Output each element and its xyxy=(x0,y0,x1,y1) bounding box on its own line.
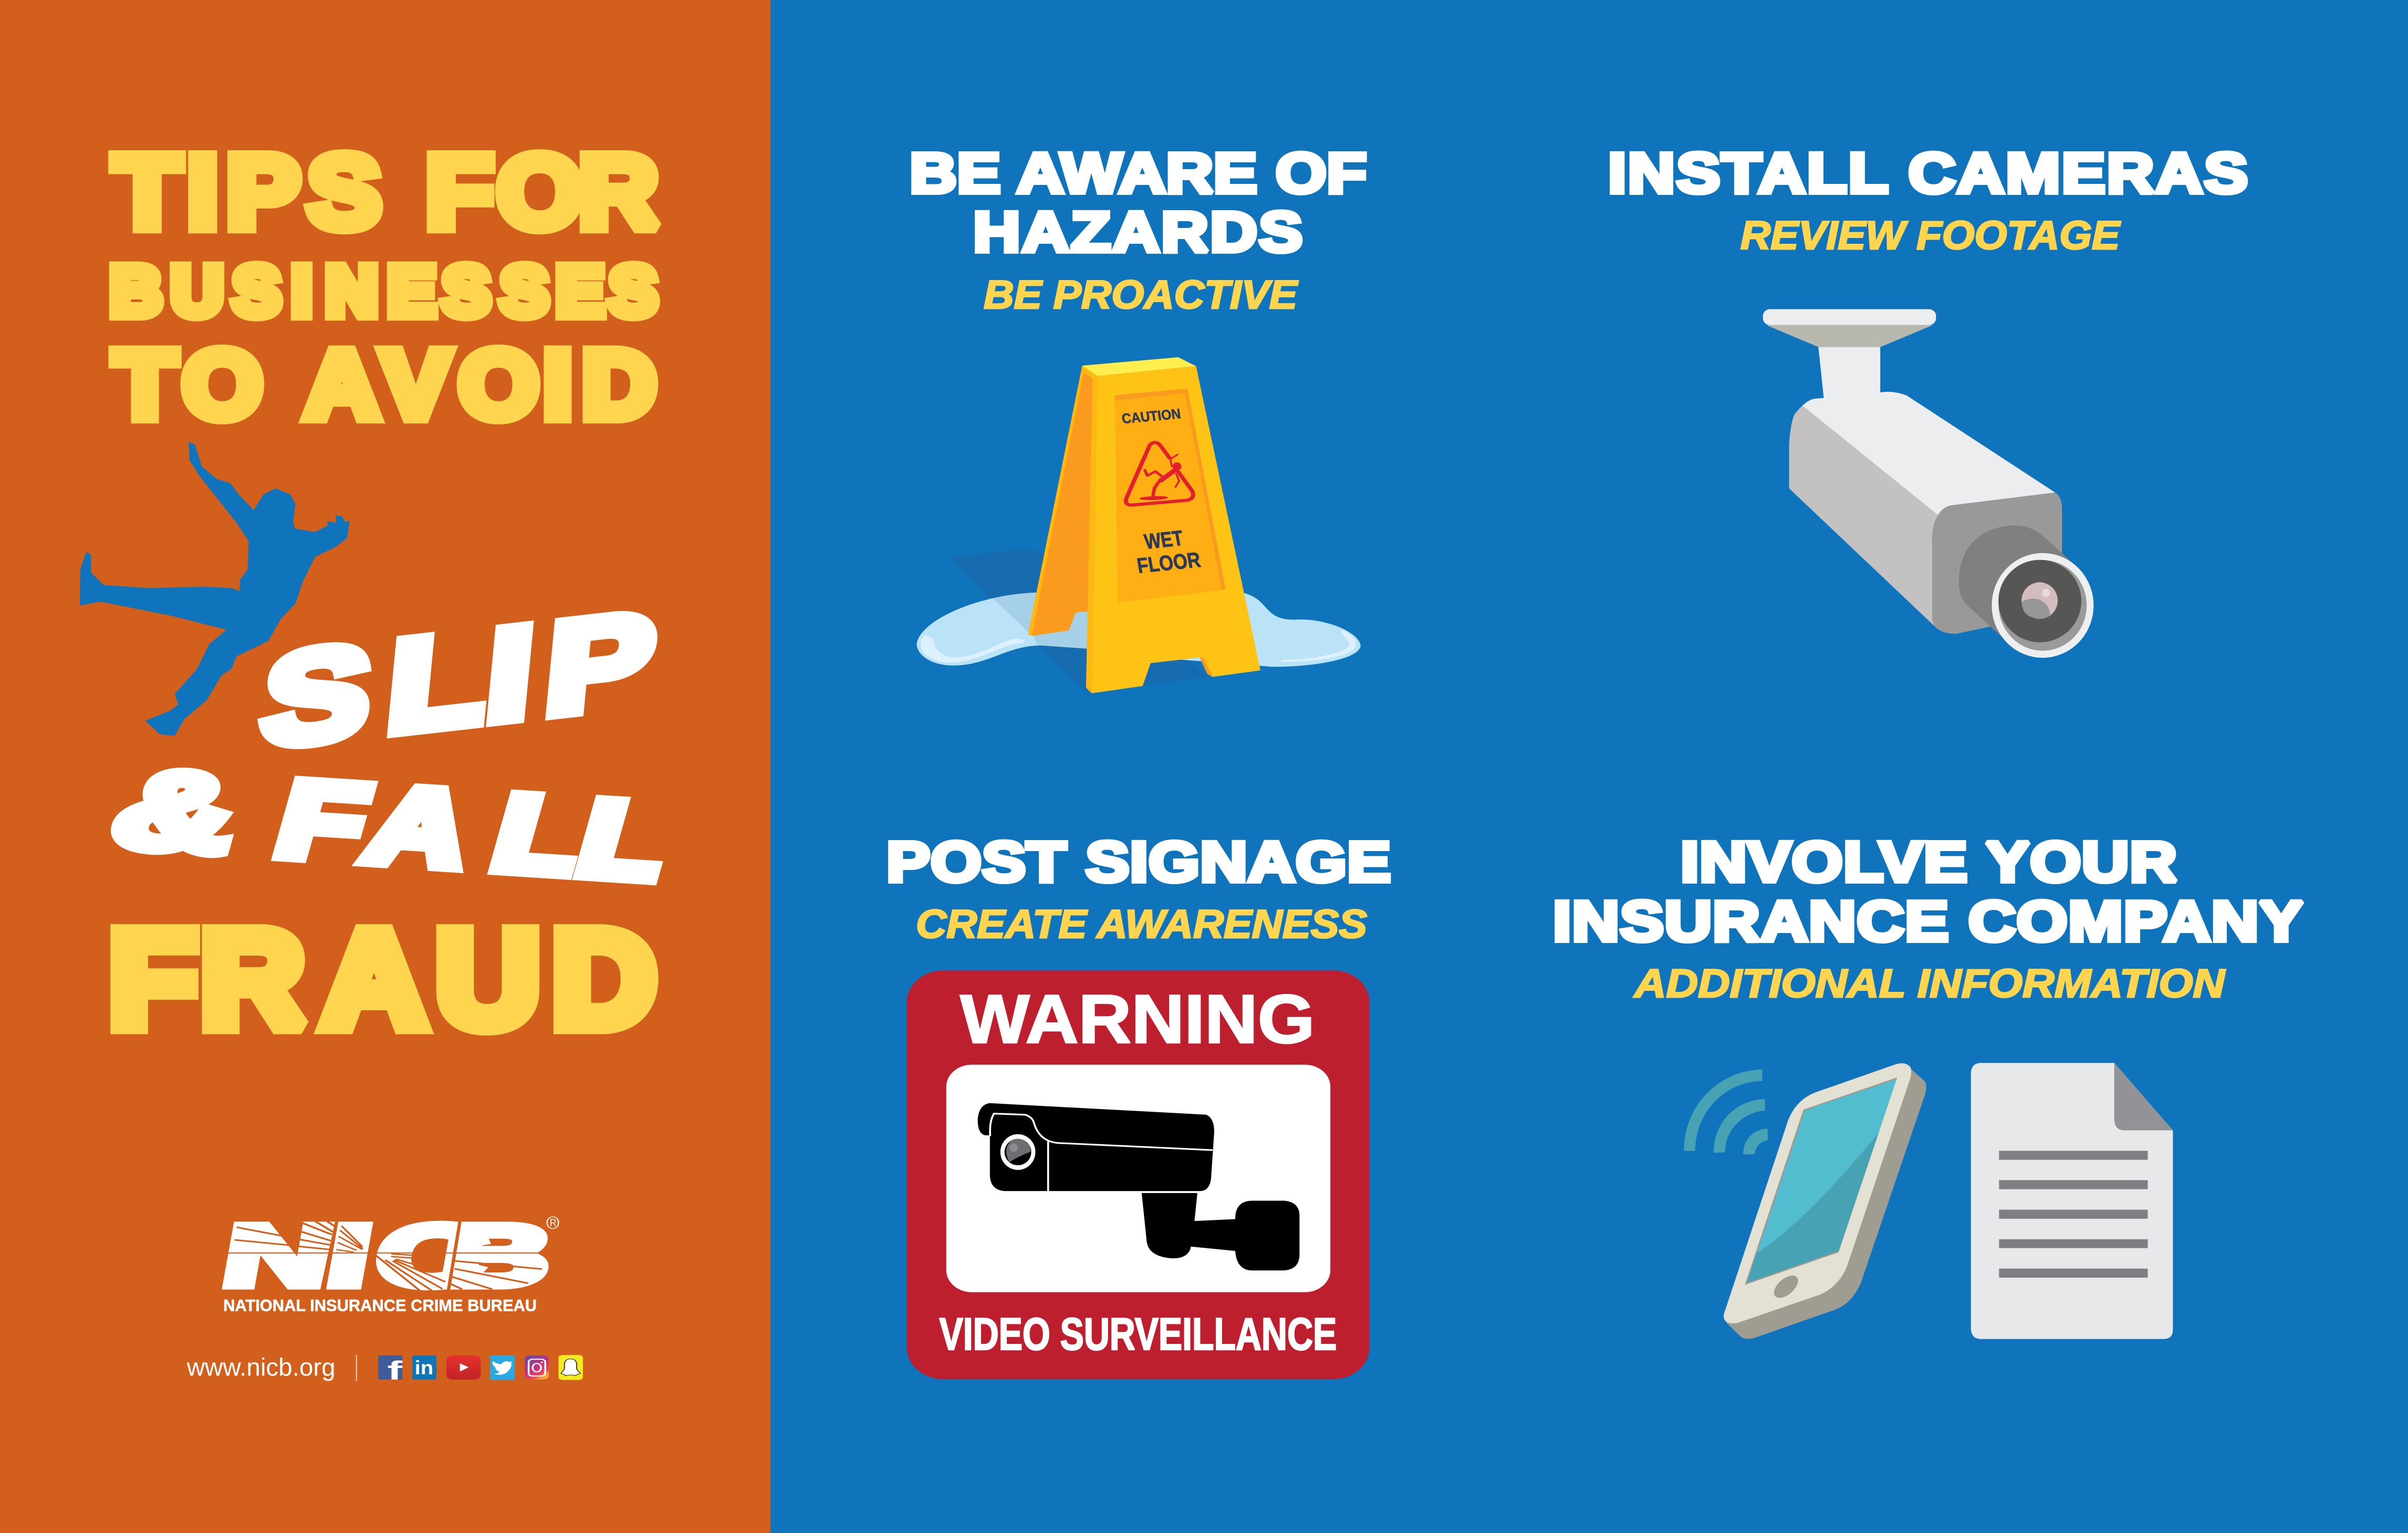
sign back panel xyxy=(1028,366,1098,636)
panel: involve your insurance company xyxy=(1553,830,2303,1339)
shadow on puddle xyxy=(993,593,1093,649)
sign shadow xyxy=(948,548,1211,693)
heading: be aware of hazards: HAZARDS xyxy=(973,200,1302,264)
icon: instagram xyxy=(525,1355,549,1380)
wet label: WET xyxy=(1142,526,1185,554)
divider xyxy=(356,1355,357,1381)
logo full name: NATIONAL INSURANCE CRIME BUREAU xyxy=(223,1297,537,1314)
title line: fraud: FRAUD xyxy=(109,903,656,1055)
icon: linkedin: in xyxy=(415,1357,433,1379)
heading: install cameras: INSTALL CAMERAS xyxy=(1608,141,2248,205)
heading: involve your insurance company: INSURANCE COMPANY xyxy=(1553,889,2303,953)
heading: involve your insurance company: INVOLVE YOUR xyxy=(1681,830,2177,894)
red sign board xyxy=(907,970,1370,1379)
icon: linkedin xyxy=(412,1355,436,1380)
icon: snapchat xyxy=(558,1355,583,1380)
icon: black camera silhouette xyxy=(978,1103,1299,1270)
icon: facebook: f xyxy=(387,1356,403,1385)
subheading: be proactive: BE PROACTIVE xyxy=(984,273,1298,317)
camera body side xyxy=(1789,406,1938,627)
lens barrel xyxy=(1959,525,2072,638)
sign text: warning: WARNING xyxy=(960,980,1315,1057)
smartphone xyxy=(1724,1063,1926,1339)
panel: post signage xyxy=(887,830,1391,1379)
icon: slipping person silhouette xyxy=(80,442,350,736)
icon: security camera xyxy=(1763,309,2093,658)
subheading: create awareness: CREATE AWARENESS xyxy=(916,902,1367,947)
camera front face xyxy=(1932,492,2062,634)
subheading: additional information: ADDITIONAL INFORMATION xyxy=(1633,961,2226,1006)
ceiling mount plate xyxy=(1763,309,1936,325)
warning sign xyxy=(907,970,1370,1379)
title block: tips for businesses to avoid slip and fall fraud xyxy=(80,134,681,1055)
mount stem xyxy=(1818,347,1880,400)
signal waves xyxy=(1684,1069,1768,1154)
headline word: slip: SLIP xyxy=(256,585,661,775)
puddle highlights xyxy=(921,630,1356,662)
icon: wet floor caution sign with puddle xyxy=(916,357,1361,693)
water puddle xyxy=(916,593,1361,667)
floor label: FLOOR xyxy=(1135,548,1203,578)
registered mark: R xyxy=(550,1217,556,1228)
document xyxy=(1971,1063,2173,1339)
heading: be aware of hazards: BE AWARE OF xyxy=(910,141,1367,205)
headline word: fall: FALL xyxy=(265,759,681,902)
logo: NICB with name xyxy=(186,1207,583,1385)
caution label: CAUTION xyxy=(1121,406,1182,427)
heading: post signage: POST SIGNAGE xyxy=(887,830,1391,894)
registered mark xyxy=(547,1217,558,1229)
heading: involve your insurance company xyxy=(1553,830,2303,953)
label frame xyxy=(1115,389,1226,602)
panel: install cameras xyxy=(1608,141,2248,658)
logo rays xyxy=(218,1218,549,1291)
subheading: review footage: REVIEW FOOTAGE xyxy=(1740,213,2121,258)
icon: twitter xyxy=(490,1355,515,1380)
panel: be aware of hazards xyxy=(910,141,1367,693)
title line: to avoid: TO AVOID xyxy=(114,331,656,438)
warning triangle with falling figure xyxy=(1126,442,1193,505)
sign text: video surveillance: VIDEO SURVEILLANCE xyxy=(939,1308,1337,1359)
heading: be aware of hazards xyxy=(910,141,1367,264)
sign top edge xyxy=(1082,357,1196,376)
panel: orange left sidebar xyxy=(0,0,770,1533)
sign front panel xyxy=(1092,366,1260,693)
icon: facebook xyxy=(378,1355,403,1385)
white sign panel xyxy=(946,1065,1330,1292)
title line: businesses: BUSINESSES xyxy=(110,252,657,330)
camera body top xyxy=(1802,392,2055,515)
icon: youtube xyxy=(446,1355,481,1380)
website url: www.nicb.org xyxy=(186,1353,336,1381)
sign rear foot edge xyxy=(1199,656,1213,677)
lens ring xyxy=(1992,553,2093,658)
title line: tips for: TIPS FOR xyxy=(113,134,658,249)
icons: phone and document xyxy=(1684,1063,2173,1339)
lens glass xyxy=(2021,582,2058,619)
headline word: ampersand: & xyxy=(101,747,253,876)
logo wordmark: NICB xyxy=(216,1207,560,1304)
sign side strip xyxy=(1086,376,1098,693)
